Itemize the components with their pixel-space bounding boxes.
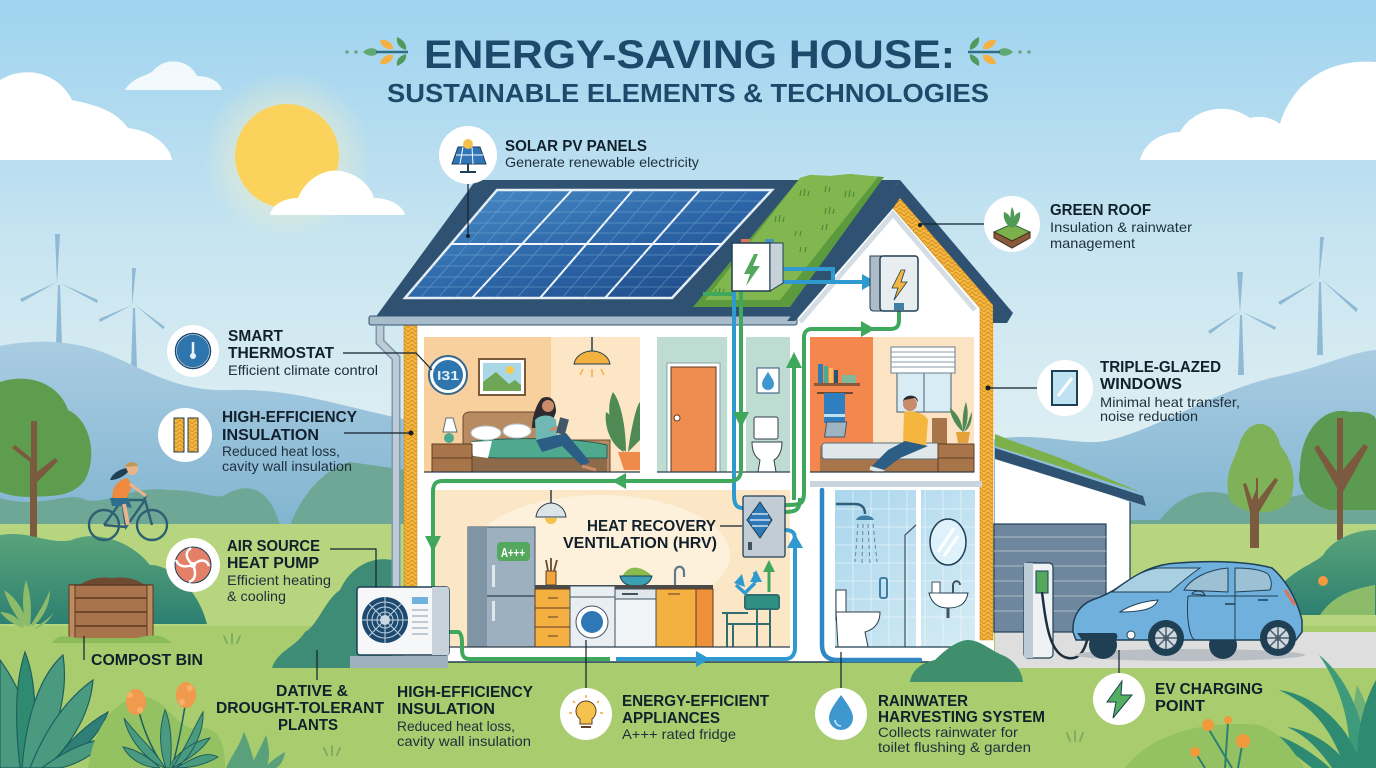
fridge xyxy=(468,527,535,647)
label: high-efficiency insulation (bottom) xyxy=(397,684,533,749)
callout: high-efficiency insulation (wall): INSULATION xyxy=(222,427,319,444)
bed xyxy=(820,418,974,472)
room: upstairs bedroom xyxy=(810,337,974,472)
label: high-efficiency insulation (bottom): INSULATION xyxy=(397,701,495,718)
callout: rainwater harvesting system xyxy=(815,652,1045,755)
pendant lamp xyxy=(574,337,610,377)
green roof xyxy=(693,174,884,307)
ground xyxy=(0,524,1376,768)
label: compost bin xyxy=(84,636,203,669)
floor slab upstairs xyxy=(424,472,982,647)
label: high-efficiency insulation (bottom): Reduced heat loss, xyxy=(397,718,515,734)
garage xyxy=(994,434,1146,632)
door xyxy=(667,363,720,472)
kitchen room xyxy=(433,490,790,647)
callout: high-efficiency insulation (wall): cavity wall insulation xyxy=(222,458,352,474)
house foundation line xyxy=(440,661,945,663)
bed xyxy=(463,412,610,472)
title xyxy=(387,33,989,108)
label: compost bin: COMPOST BIN xyxy=(91,652,203,669)
callout: energy-efficient appliances: A+++ rated fridge xyxy=(622,726,736,742)
towel rail xyxy=(817,393,853,423)
left tree xyxy=(0,379,91,537)
bush: right of car xyxy=(1268,530,1376,615)
callout: EV charging point xyxy=(1093,650,1263,725)
callout: EV charging point: EV CHARGING xyxy=(1155,681,1263,698)
HRV unit xyxy=(743,496,785,557)
callout: EV charging point: POINT xyxy=(1155,698,1205,715)
fern left of compost bin xyxy=(0,580,54,628)
sink xyxy=(929,581,968,618)
distant bushes xyxy=(0,462,1376,540)
label: high-efficiency insulation (bottom): HIGH-EFFICIENCY xyxy=(397,684,533,701)
callout: triple-glazed windows: noise reduction xyxy=(1100,408,1198,424)
room: bedroom xyxy=(424,337,640,472)
room: hallway xyxy=(657,337,790,472)
callout: smart thermostat xyxy=(167,325,432,378)
junction box xyxy=(732,239,783,291)
compost bin xyxy=(52,577,172,643)
title: ENERGY-SAVING HOUSE: xyxy=(424,33,955,77)
mirror xyxy=(930,519,966,565)
wind turbines xyxy=(20,234,1358,375)
label: high-efficiency insulation (bottom): cavity wall insulation xyxy=(397,733,531,749)
callout: energy-efficient appliances: ENERGY-EFFICIENT xyxy=(622,693,769,710)
insulation: walls and gable xyxy=(404,198,993,640)
callout: energy-efficient appliances: APPLIANCES xyxy=(622,710,720,727)
callout: green roof: management xyxy=(1050,235,1135,251)
man with laptop xyxy=(825,396,928,472)
water-drop sign xyxy=(757,368,779,393)
callout: rainwater harvesting system: toilet flushing & garden xyxy=(878,739,1031,755)
bush beside heat pump xyxy=(272,559,392,668)
dishwasher xyxy=(615,589,656,647)
callout: green roof xyxy=(918,196,1192,252)
worktop and cabinets xyxy=(535,585,713,647)
callout: triple-glazed windows: TRIPLE-GLAZED xyxy=(1100,359,1221,376)
callout: smart thermostat: Efficient climate control xyxy=(228,362,378,378)
label: native and drought-tolerant plants: PLANTS xyxy=(278,717,338,734)
distant hills xyxy=(0,342,1376,540)
callout: green roof: GREEN ROOF xyxy=(1050,202,1151,219)
foreground plants bottom left xyxy=(0,652,112,768)
washing machine xyxy=(570,586,615,647)
callout: air source heat pump: & cooling xyxy=(227,588,286,604)
downspout xyxy=(380,326,396,590)
pipes: blue xyxy=(616,269,864,659)
toilet xyxy=(836,590,880,647)
callout: rainwater harvesting system: RAINWATER xyxy=(878,693,968,710)
callout: air source heat pump: HEAT PUMP xyxy=(227,555,319,572)
label: heat recovery ventilation: VENTILATION (HRV) xyxy=(563,535,717,552)
sun xyxy=(202,71,372,241)
house plant xyxy=(606,392,640,470)
solar PV array xyxy=(405,190,772,298)
callout: air source heat pump: Efficient heating xyxy=(227,572,331,588)
callout: solar PV panels: Generate renewable electricity xyxy=(505,154,699,170)
grass tufts xyxy=(224,634,1083,755)
dining chair and table xyxy=(722,595,779,647)
label: native and drought-tolerant plants xyxy=(216,650,384,734)
shower xyxy=(836,504,877,564)
title: SUSTAINABLE ELEMENTS & TECHNOLOGIES xyxy=(387,78,989,108)
foreground flowers bottom left xyxy=(88,682,285,768)
callout: rainwater harvesting system: Collects rainwater for xyxy=(878,724,1018,740)
bookshelf xyxy=(814,364,860,386)
main roof xyxy=(369,180,900,325)
clouds xyxy=(0,61,1376,215)
utensil jar xyxy=(546,558,557,585)
callout: smart thermostat: SMART xyxy=(228,328,283,345)
arrowheads xyxy=(425,274,876,667)
callout: high-efficiency insulation (wall) xyxy=(158,408,414,474)
bush: far left xyxy=(0,534,207,624)
callout: high-efficiency insulation (wall): HIGH-EFFICIENCY xyxy=(222,409,357,426)
foreground flowers bottom right xyxy=(1125,716,1305,768)
fruit bowl xyxy=(620,568,652,586)
gable roof xyxy=(787,180,1013,323)
callout: high-efficiency insulation (wall): Reduced heat loss, xyxy=(222,443,340,459)
callout: rainwater harvesting system: HARVESTING SYSTEM xyxy=(878,709,1045,726)
pipes: green xyxy=(433,291,899,659)
sky background xyxy=(0,0,1376,540)
label: native and drought-tolerant plants: DROUGHT-TOLERANT xyxy=(216,700,384,717)
callout: triple-glazed windows: WINDOWS xyxy=(1100,376,1182,393)
fridge: A+++ xyxy=(501,545,525,560)
house body xyxy=(404,208,994,662)
rainwater pipe xyxy=(822,490,920,660)
EV charger with cable xyxy=(1024,563,1102,658)
right trees xyxy=(1227,411,1376,548)
bush in front of bathroom xyxy=(910,640,1023,682)
callout: green roof: Insulation & rainwater xyxy=(1050,219,1192,235)
callout: air source heat pump xyxy=(166,538,376,604)
callout: energy-efficient appliances xyxy=(560,640,769,742)
ceiling lamp xyxy=(536,490,566,524)
bathroom xyxy=(835,490,975,647)
callout: solar PV panels: SOLAR PV PANELS xyxy=(505,138,647,155)
callout: triple-glazed windows xyxy=(986,359,1240,424)
label: heat recovery ventilation: HEAT RECOVERY xyxy=(587,518,716,535)
heat pump plinth xyxy=(350,656,448,668)
nightstand and lamp xyxy=(432,418,472,472)
tap xyxy=(675,567,684,585)
callout: smart thermostat: THERMOSTAT xyxy=(228,345,334,362)
electric car xyxy=(1073,562,1305,661)
foreground plants bottom right xyxy=(1262,655,1376,768)
cyclist xyxy=(89,462,167,540)
callout: air source heat pump: AIR SOURCE xyxy=(227,538,320,555)
thermostat on wall xyxy=(429,356,467,394)
thermostat on wall: I31 xyxy=(437,368,459,383)
callout: solar PV panels xyxy=(439,126,699,238)
toilet xyxy=(752,417,782,472)
woman with tablet xyxy=(532,397,596,470)
title ornament left xyxy=(345,37,408,66)
window with blind xyxy=(891,347,955,412)
label: heat recovery ventilation xyxy=(563,518,742,552)
driveway xyxy=(995,632,1376,668)
air source heat pump unit xyxy=(357,587,449,655)
bush right of car with flower plant xyxy=(1318,576,1375,615)
plant xyxy=(950,402,972,443)
title ornament right xyxy=(968,37,1031,66)
inverter xyxy=(870,256,918,311)
callout: triple-glazed windows: Minimal heat transfer, xyxy=(1100,394,1240,410)
label: native and drought-tolerant plants: DATIVE & xyxy=(276,683,348,700)
picture xyxy=(479,359,525,395)
